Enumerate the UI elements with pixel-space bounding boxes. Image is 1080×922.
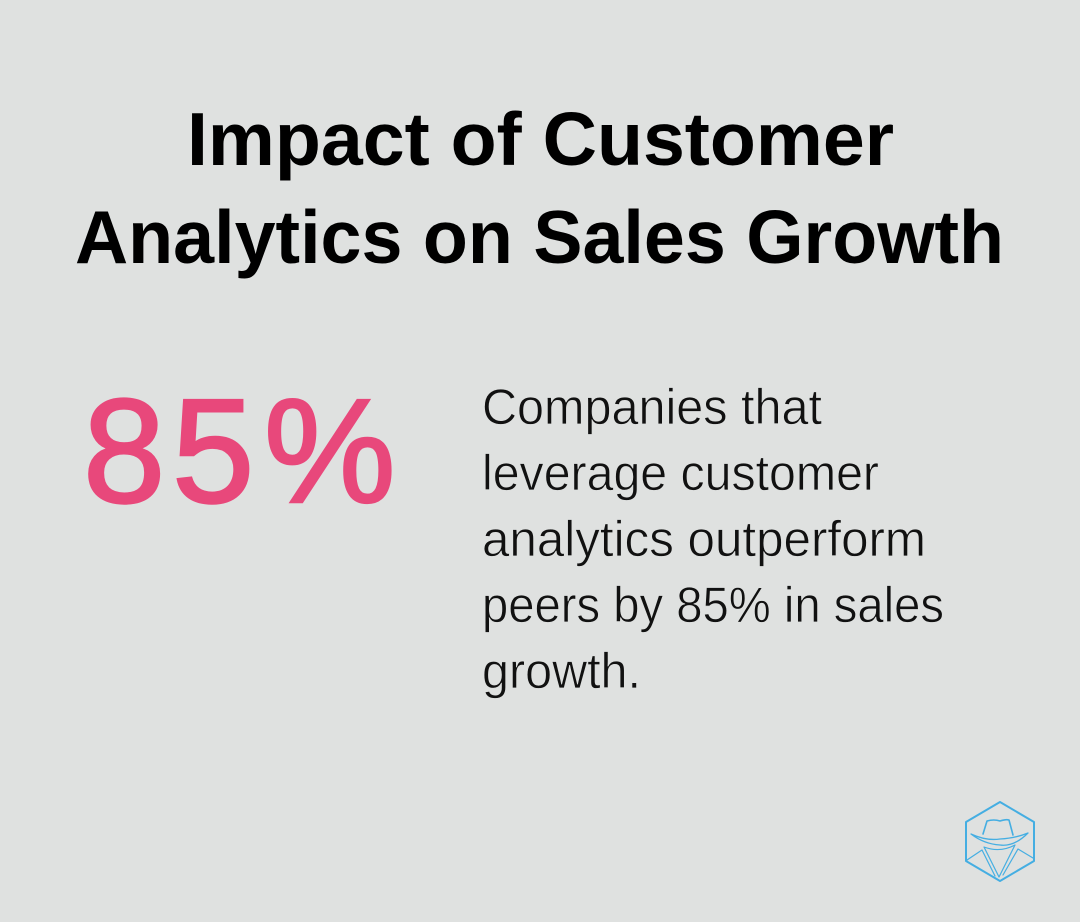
title bbox=[75, 97, 1004, 279]
description text: leverage customer bbox=[482, 445, 879, 501]
big statistic: 85%: 85% bbox=[83, 369, 396, 534]
description text: peers by 85% in sales bbox=[482, 577, 944, 633]
icon: hexagon logo with hat and coat bbox=[966, 802, 1034, 881]
title: Impact of Customer bbox=[187, 97, 894, 181]
description text bbox=[482, 379, 944, 699]
description text: analytics outperform bbox=[482, 511, 926, 567]
title: Analytics on Sales Growth bbox=[75, 195, 1004, 279]
description text: Companies that bbox=[482, 379, 822, 435]
description text: growth. bbox=[482, 643, 641, 699]
